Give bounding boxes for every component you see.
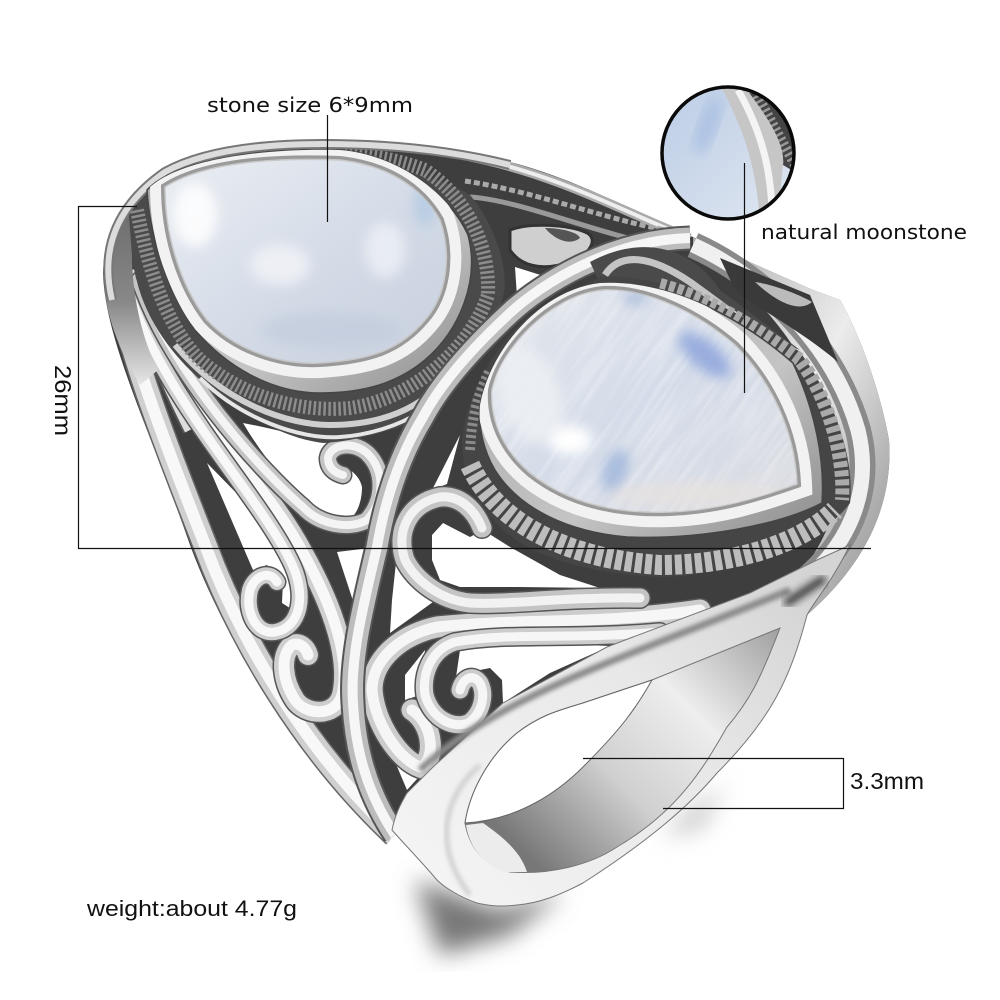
right shell bar bbox=[693, 245, 862, 592]
head 1 bezel bbox=[147, 150, 471, 393]
stone 2 bbox=[491, 289, 798, 513]
head 1 lower rim detail bbox=[175, 345, 440, 437]
head 2 upper dark setting bbox=[590, 247, 800, 350]
dimension: 26mm bracket bbox=[78, 206, 871, 548]
label: natural moonstone: natural moonstone bbox=[761, 220, 967, 244]
head 1 rope ring bbox=[137, 153, 488, 409]
head 1 top rim bbox=[108, 144, 510, 300]
left outer bar bbox=[116, 270, 395, 835]
V bar and arc over stone 2 bbox=[353, 238, 690, 835]
ring bbox=[103, 139, 890, 906]
shank shading bbox=[420, 578, 825, 895]
head 1 base bbox=[128, 162, 505, 443]
left shell bbox=[104, 200, 158, 385]
drop shadow bbox=[415, 785, 725, 955]
inset: moonstone close-up bbox=[662, 85, 800, 222]
label: 26mm: 26mm bbox=[50, 365, 76, 436]
band opening bbox=[465, 680, 652, 823]
scroll: central lower right bbox=[424, 632, 660, 725]
leader: natural moonstone bbox=[744, 163, 746, 393]
label: stone size: stone size 6*9mm bbox=[207, 93, 413, 117]
silhouette: ring head and openwork base bbox=[103, 140, 889, 832]
upper right dark detail bbox=[720, 258, 838, 362]
left thin strand bbox=[130, 270, 190, 430]
band inner highlight bbox=[466, 823, 527, 872]
front shank bbox=[392, 545, 850, 906]
scroll: middle left bbox=[128, 290, 300, 632]
scroll: upper left bbox=[140, 280, 380, 525]
scroll: central upper bbox=[402, 497, 640, 603]
scroll: lower left bbox=[150, 300, 344, 712]
stone 1 bbox=[165, 159, 446, 363]
label: weight: weight:about 4.77g bbox=[86, 896, 297, 921]
right shell bbox=[693, 237, 889, 615]
openwork gaps bbox=[207, 267, 610, 790]
head 2 bezel bbox=[480, 283, 823, 537]
dimension: 3.3mm bracket bbox=[583, 758, 844, 808]
head 2 base bbox=[462, 277, 851, 577]
label: 3.3mm: 3.3mm bbox=[850, 768, 924, 794]
scroll: central lower left bbox=[372, 610, 700, 767]
leaf scroll between stones bbox=[510, 225, 592, 267]
upper bars between stones bbox=[465, 157, 690, 245]
band inner surface bbox=[465, 628, 780, 873]
head 2 twisted rope bbox=[470, 285, 842, 565]
leader: stone size bbox=[326, 115, 328, 222]
